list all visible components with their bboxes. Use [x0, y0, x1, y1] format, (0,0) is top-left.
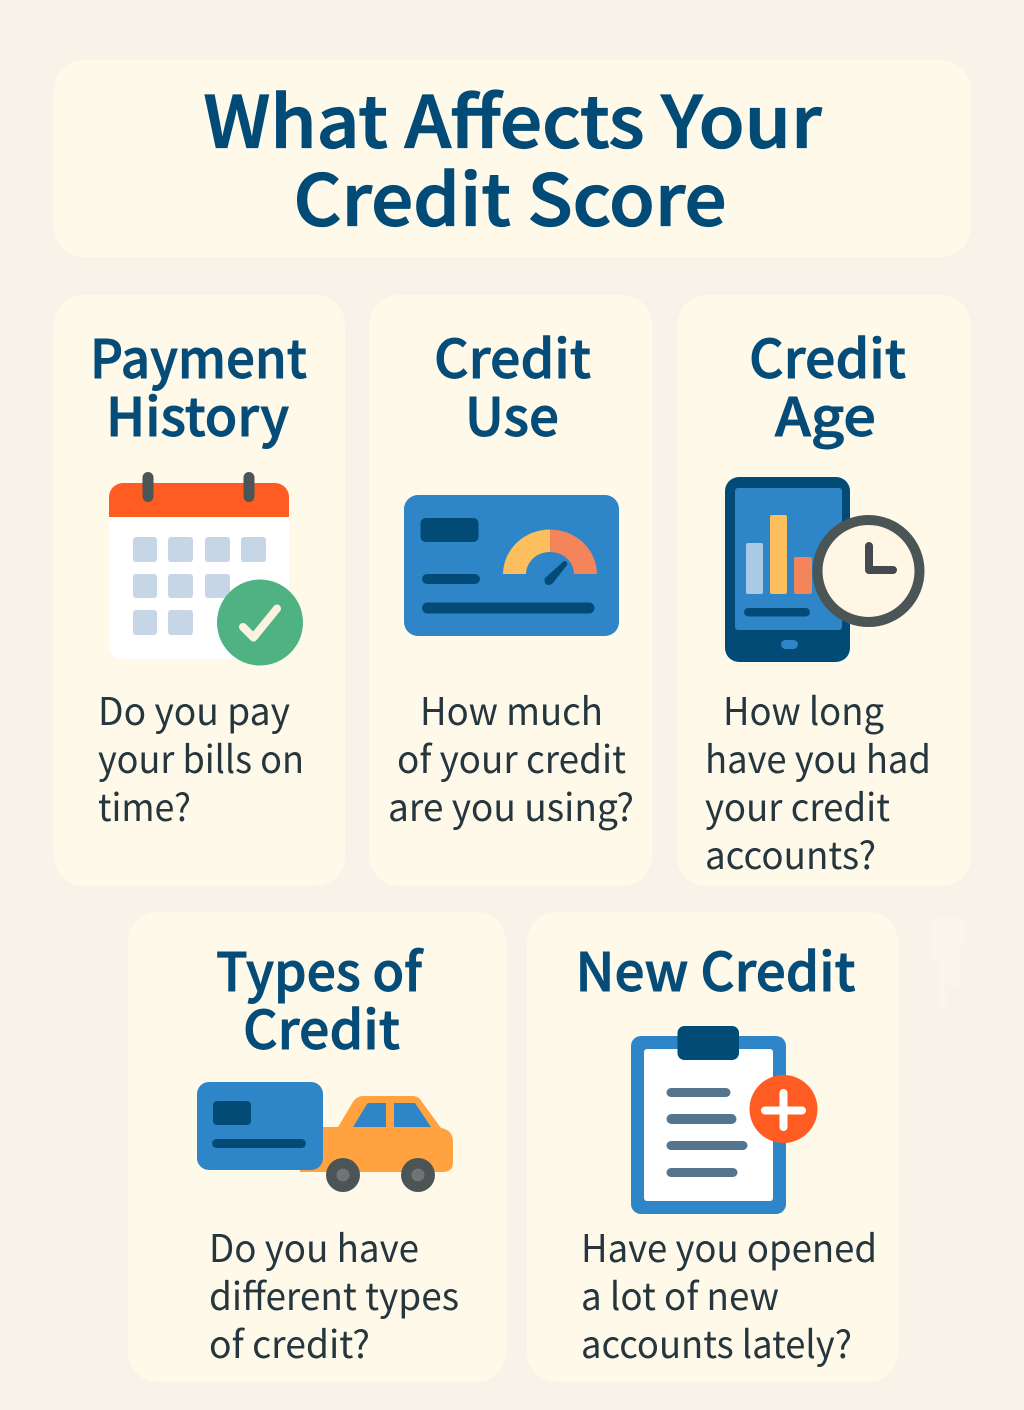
text: payment history question: [98, 681, 304, 832]
panel: payment history: [54, 295, 345, 886]
heading: credit age: Age: [775, 376, 876, 452]
text: payment history question: Do you pay: [98, 681, 290, 736]
icon: calendar with check: [109, 472, 303, 666]
heading: credit use: Use: [465, 376, 559, 452]
title: Credit Score: [294, 144, 726, 246]
panel: types of credit: [128, 912, 506, 1382]
text: credit age question: [705, 681, 931, 880]
text: new credit question: Have you opened: [581, 1218, 877, 1273]
panel: new credit: [527, 912, 898, 1382]
heading: payment history: History: [106, 376, 289, 452]
text: types of credit question: Do you have: [209, 1218, 419, 1273]
text: types of credit question: of credit?: [209, 1314, 370, 1369]
heading: new credit: New Credit: [576, 931, 856, 1007]
heading: types of credit: Types of: [216, 931, 424, 1007]
text: credit use question: [388, 681, 634, 832]
icon: credit card with gauge: [404, 495, 619, 636]
title panel: [54, 60, 971, 257]
text: credit age question: have you had: [705, 729, 931, 784]
text: credit age question: How long: [723, 681, 884, 736]
heading: credit age: Credit: [749, 318, 906, 394]
text: credit use question: are you using?: [388, 777, 634, 832]
text: credit use question: How much: [420, 681, 603, 736]
panel: credit age: [677, 295, 971, 886]
heading: payment history: [90, 318, 307, 452]
text: types of credit question: [209, 1218, 459, 1369]
icon: tablet and clock: [725, 477, 920, 662]
text: payment history question: your bills on: [98, 729, 304, 784]
icon: clipboard with plus: [631, 1026, 818, 1214]
heading: credit use: [434, 318, 591, 452]
heading: types of credit: Credit: [243, 989, 400, 1065]
heading: types of credit: [216, 931, 424, 1065]
text: payment history question: time?: [98, 777, 191, 832]
text: credit age question: accounts?: [705, 825, 876, 880]
text: credit age question: your credit: [705, 777, 890, 832]
text: new credit question: [581, 1218, 877, 1369]
text: new credit question: a lot of new: [581, 1266, 779, 1321]
text: types of credit question: different types: [209, 1266, 459, 1321]
heading: credit age: [749, 318, 906, 452]
text: new credit question: accounts lately?: [581, 1314, 852, 1369]
title: [204, 66, 823, 246]
text: credit use question: of your credit: [397, 729, 626, 784]
heading: credit use: Credit: [434, 318, 591, 394]
icon: card and car: [197, 1082, 453, 1192]
heading: payment history: Payment: [90, 318, 307, 394]
title: What Affects Your: [204, 66, 823, 168]
panel: credit use: [369, 295, 652, 886]
